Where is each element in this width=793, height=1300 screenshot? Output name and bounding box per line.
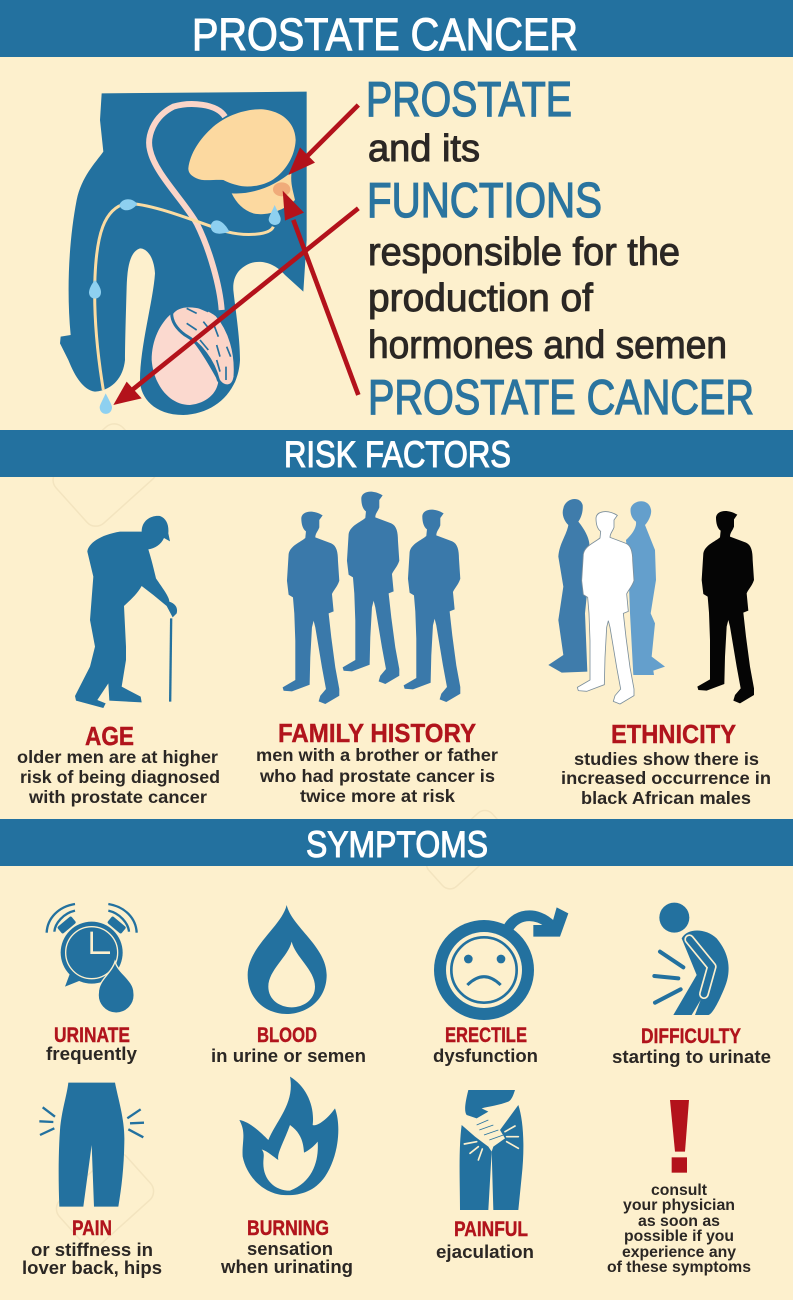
heading: prostate and its functions: production of (368, 277, 593, 320)
heading: prostate and its functions: responsible for the (368, 231, 680, 274)
risk: family history: twice more at risk (300, 786, 455, 806)
anatomy diagram (60, 92, 358, 415)
symptom: pain (22, 1217, 162, 1278)
risk: family history: who had prostate cancer is (259, 766, 495, 786)
risk: ethnicity (561, 719, 771, 808)
callout: consult physician (607, 1182, 751, 1276)
heading: prostate and its functions: FUNCTIONS (367, 174, 602, 228)
heading: prostate and its functions: PROSTATE (366, 73, 572, 127)
symptoms banner (0, 819, 793, 866)
callout: consult physician: experience any (622, 1244, 736, 1261)
risk: age: risk of being diagnosed (20, 767, 220, 787)
symptom: difficulty: starting to urinate (612, 1047, 771, 1067)
risk: family history (256, 718, 498, 806)
risk: ethnicity: black African males (581, 788, 751, 808)
risk: age (17, 721, 220, 807)
symptom: erectile: dysfunction (433, 1046, 538, 1066)
symptom: painful: ejaculation (436, 1242, 534, 1262)
symptom: pain: lover back, hips (22, 1258, 162, 1278)
risk: ethnicity: studies show there is (574, 749, 759, 769)
symptom: burning: sensation (247, 1239, 333, 1259)
risk: age: older men are at higher (17, 747, 218, 767)
callout: consult physician: possible if you (624, 1228, 734, 1245)
callout: consult physician: of these symptoms (607, 1259, 751, 1276)
heading: prostate and its functions (366, 73, 754, 425)
symptom: burning: when urinating (220, 1257, 353, 1277)
title banner (0, 0, 793, 60)
symptom: erectile (433, 1024, 538, 1066)
symptom: pain: or stiffness in (31, 1240, 153, 1260)
symptom: blood (211, 1024, 366, 1066)
symptom: painful: PAINFUL (454, 1218, 528, 1241)
symptom: urinate: URINATE (54, 1024, 130, 1047)
heading: prostate and its functions: hormones and semen (368, 324, 727, 367)
symptoms banner: SYMPTOMS (306, 824, 488, 865)
symptom: blood: BLOOD (257, 1024, 317, 1047)
icon: sad male symbol (434, 907, 568, 1020)
risk: ethnicity: increased occurrence in (561, 768, 771, 788)
risk factors banner: RISK FACTORS (284, 434, 511, 475)
risk: age: AGE (85, 721, 134, 751)
icon: hand on groin (460, 1090, 523, 1210)
callout: consult physician: your physician (623, 1197, 735, 1214)
silhouettes: family group (283, 492, 460, 704)
heading: prostate and its functions: and its (368, 128, 480, 170)
symptom: difficulty (612, 1025, 771, 1067)
callout: consult physician: consult (651, 1182, 707, 1199)
icon: hips and legs (39, 1083, 144, 1207)
callout: consult physician: as soon as (638, 1213, 720, 1230)
symptom: burning: BURNING (247, 1217, 329, 1240)
silhouette: old man with cane (75, 516, 177, 708)
risk: family history: FAMILY HISTORY (278, 718, 476, 748)
risk: family history: men with a brother or father (256, 745, 498, 765)
symptom: pain: PAIN (72, 1217, 112, 1240)
risk: ethnicity: ETHNICITY (611, 719, 736, 749)
title banner: PROSTATE CANCER (192, 9, 578, 60)
symptom: blood: in urine or semen (211, 1046, 366, 1066)
symptom: urinate: frequently (46, 1044, 137, 1064)
icon: blood drop (248, 905, 327, 1014)
icon: flame (239, 1077, 338, 1195)
risk factors banner (0, 430, 793, 477)
silhouettes: ethnicity group (548, 499, 754, 704)
symptom: difficulty: DIFFICULTY (641, 1025, 741, 1048)
icon: exclamation mark (670, 1100, 689, 1173)
symptom: burning (220, 1217, 353, 1277)
symptom: painful (436, 1218, 534, 1262)
symptom: erectile: ERECTILE (445, 1024, 527, 1047)
risk: age: with prostate cancer (28, 787, 207, 807)
icon: alarm clock with drop (47, 904, 137, 1013)
icon: bent figure (654, 903, 729, 1015)
symptom: urinate (46, 1024, 137, 1064)
